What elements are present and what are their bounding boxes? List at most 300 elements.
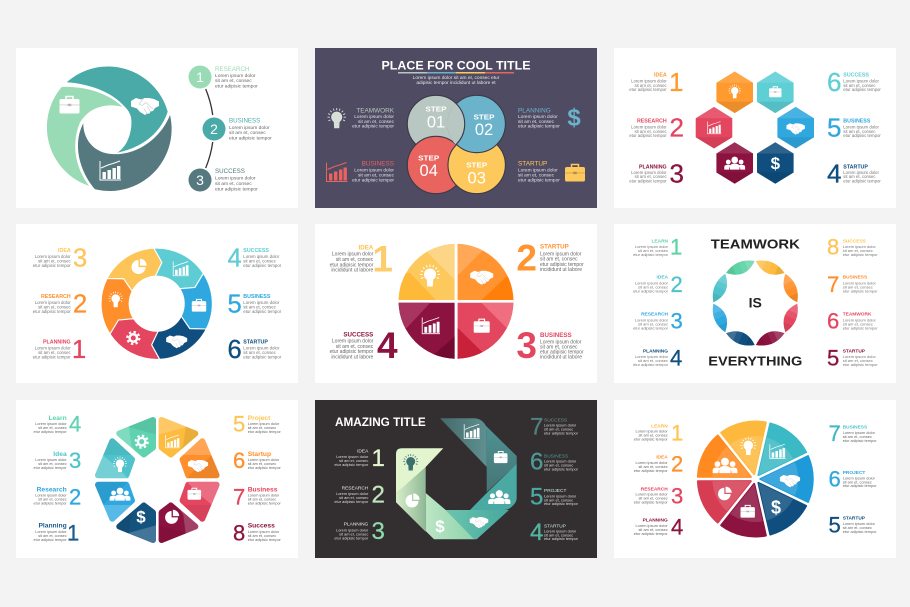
text: research xyxy=(629,119,668,138)
slice: blue xyxy=(760,456,813,502)
icon: bulb xyxy=(113,457,127,472)
text: business xyxy=(843,275,878,294)
text: startup xyxy=(843,164,881,184)
text: learn: etur adipisic tempor xyxy=(633,252,669,257)
text: business: Lorem ipsum dolor xyxy=(248,494,280,498)
text: teamwork: Lorem ipsum dolor xyxy=(354,114,394,120)
text: learn: Lorem ipsum dolor xyxy=(35,422,67,426)
icon: bulb xyxy=(108,291,123,307)
text: success: Lorem ipsum dolor xyxy=(332,339,374,345)
number 7: 7 xyxy=(530,413,543,440)
number 5: 5 xyxy=(233,412,245,437)
text: project: PROJECT xyxy=(544,488,566,494)
icon: dollar: $ xyxy=(435,517,445,536)
step 1 badge: 1 xyxy=(196,69,204,85)
text: business: etur adipisic tempor xyxy=(229,136,272,142)
text: idea: sit am et, consec xyxy=(38,462,67,466)
text: idea: Idea xyxy=(53,451,67,458)
icon: briefcase xyxy=(740,505,755,518)
text: learn: etur adipisic tempor xyxy=(634,436,668,441)
text: success: etur adipisic tempor xyxy=(248,538,282,542)
text: startup: etur adipisic tempor xyxy=(544,536,579,541)
text: project: etur adipisic tempor xyxy=(544,501,579,506)
text: learn: LEARN xyxy=(651,423,668,429)
text: planning: sit am et, consec xyxy=(638,358,668,363)
text: learn: Learn xyxy=(48,415,67,422)
text: startup: Lorem ipsum dolor xyxy=(518,168,558,174)
icon: bulb xyxy=(728,85,741,98)
number 6: 6 xyxy=(233,448,245,473)
text: idea: Lorem ipsum dolor xyxy=(635,281,669,286)
text: startup: Lorem ipsum dolor xyxy=(843,521,876,526)
text: success: SUCCESS xyxy=(243,248,269,254)
step 1 badge xyxy=(188,66,212,88)
text: research: Lorem ipsum dolor xyxy=(635,317,669,322)
text: idea: Lorem ipsum dolor xyxy=(336,454,369,459)
text: startup xyxy=(843,348,878,367)
text: idea xyxy=(33,248,72,268)
text: research: Research xyxy=(37,487,67,494)
text: business: etur adipisic tempor xyxy=(248,502,282,506)
text: planning: Lorem ipsum dolor xyxy=(635,354,669,359)
text: planning: Lorem ipsum dolor xyxy=(631,170,667,175)
text: success: Success xyxy=(248,523,275,530)
text: research: Lorem ipsum dolor xyxy=(336,491,369,496)
text: planning: Lorem ipsum dolor xyxy=(35,530,67,534)
text: startup: sit am et, consec xyxy=(540,256,578,262)
icon: handshake xyxy=(470,517,488,528)
number 3: 3 xyxy=(670,309,683,334)
text: business xyxy=(540,332,584,361)
icon: bulb xyxy=(328,108,346,128)
icon: pie xyxy=(718,487,732,500)
number 2: 2 xyxy=(73,290,87,318)
number 4: 4 xyxy=(530,519,543,546)
text: project xyxy=(544,488,579,506)
icon: pie xyxy=(132,259,147,274)
text: idea: Lorem ipsum dolor xyxy=(635,460,668,465)
icon: bulb xyxy=(420,264,440,286)
number 4: 4 xyxy=(670,345,682,370)
text: startup: incididunt ut labore xyxy=(540,267,582,273)
text: business xyxy=(229,118,272,142)
text: success: sit am et, consec xyxy=(215,181,252,187)
text: idea: sit am et, consec xyxy=(638,285,668,290)
hexagon: navy xyxy=(757,142,794,184)
step labels: 01 xyxy=(427,114,445,132)
text: business: Lorem ipsum dolor xyxy=(544,458,577,463)
text: teamwork: sit am et, consec xyxy=(358,119,395,125)
icon: handshake xyxy=(786,123,805,135)
number 8: 8 xyxy=(827,235,839,260)
text: planning: PLANNING xyxy=(643,348,668,354)
text: teamwork: sit am et, consec xyxy=(843,321,873,326)
slice: orange xyxy=(694,433,761,497)
text: project: etur adipisic tempor xyxy=(248,430,282,434)
petal: yellow xyxy=(747,250,790,291)
text: startup: Lorem ipsum dolor xyxy=(248,458,280,462)
text: idea xyxy=(330,245,374,274)
segment: red xyxy=(110,319,160,359)
step 02 circle xyxy=(448,95,505,153)
text: research: RESEARCH xyxy=(641,312,669,318)
text: research: Lorem ipsum dolor xyxy=(631,124,667,130)
text: planning: PLANNING xyxy=(639,164,667,170)
number 4: 4 xyxy=(69,412,81,437)
text: research: sit am et, consec xyxy=(638,496,668,501)
text: planning: sit am et, consec xyxy=(38,534,67,538)
text: business: etur adipisic tempor xyxy=(540,350,584,356)
chart: spiral dark segment xyxy=(78,115,172,191)
icon: people xyxy=(724,157,745,170)
text: learn: sit am et, consec xyxy=(38,426,67,430)
ribbon: hands fold xyxy=(446,510,509,539)
text: teamwork: TEAMWORK xyxy=(356,107,395,114)
text: idea: etur adipisic tempor xyxy=(33,263,71,268)
text: startup: sit am et, consec xyxy=(843,525,872,530)
text: business: Lorem ipsum dolor xyxy=(354,168,394,174)
text: startup: STARTUP xyxy=(843,348,866,354)
segment: orange xyxy=(172,430,222,480)
number 6: 6 xyxy=(530,449,543,476)
number 2: 2 xyxy=(372,482,385,509)
panel: folded octagon on dark xyxy=(315,400,597,558)
icon: briefcase xyxy=(494,452,508,463)
text: learn: Lorem ipsum dolor xyxy=(635,244,669,249)
petal: maroon xyxy=(747,315,790,356)
text: project: Lorem ipsum dolor xyxy=(843,475,876,480)
text: idea: Lorem ipsum dolor xyxy=(35,254,71,259)
subtitle: Lorem ipsum dolor sit am et, consec etur xyxy=(413,75,500,81)
text: success: Lorem ipsum dolor xyxy=(843,244,876,249)
text: success: etur adipisic tempor xyxy=(843,252,878,257)
text: research: etur adipisic tempor xyxy=(634,500,668,505)
icon: briefcase xyxy=(60,96,80,114)
number 7: 7 xyxy=(827,272,839,297)
text: startup: etur adipisic tempor xyxy=(843,362,878,367)
text: project: Lorem ipsum dolor xyxy=(248,422,280,426)
text: success xyxy=(248,523,282,542)
number 2: 2 xyxy=(671,452,683,477)
text: success: etur adipisic tempor xyxy=(243,263,282,268)
text: planning: etur adipisic tempor xyxy=(34,538,67,542)
text: startup: STARTUP xyxy=(518,160,547,167)
text: research: Lorem ipsum dolor xyxy=(35,494,67,498)
text: teamwork: TEAMWORK xyxy=(843,312,872,318)
text: planning: sit am et, consec xyxy=(518,119,555,125)
step 01 overlap over step 02 xyxy=(448,103,466,145)
text: startup: STARTUP xyxy=(540,244,569,251)
step labels: 03 xyxy=(468,169,486,187)
text: idea: IDEA xyxy=(58,248,71,254)
text: learn: sit am et, consec xyxy=(638,432,668,437)
ribbon: pie fold xyxy=(396,465,426,532)
number 8: 8 xyxy=(233,521,245,546)
step 01 circle xyxy=(407,95,465,153)
quadrant: orange xyxy=(458,244,514,300)
segment: blue xyxy=(92,480,142,530)
text: business: sit am et, consec xyxy=(843,434,872,439)
text: success xyxy=(243,248,282,268)
text: business: sit am et, consec xyxy=(843,129,876,134)
text: success xyxy=(544,417,579,435)
icon: handshake xyxy=(470,271,493,285)
text: business xyxy=(243,294,282,314)
subtitle: adipisic tempor incididunt ut labore et xyxy=(416,80,496,86)
text: startup: etur adipisic tempor xyxy=(540,262,584,268)
text: startup: Lorem ipsum dolor xyxy=(243,346,280,350)
text: startup: Startup xyxy=(248,451,271,458)
text: startup: sit am et, consec xyxy=(243,350,277,355)
text: learn: LEARN xyxy=(651,238,669,244)
text: teamwork: etur adipisic tempor xyxy=(843,325,878,330)
text: idea: IDEA xyxy=(656,455,668,461)
text: startup: Lorem ipsum dolor xyxy=(843,170,879,175)
text: planning xyxy=(634,518,668,536)
text: idea: etur adipisic tempor xyxy=(634,468,668,473)
chart: spiral green segment xyxy=(47,87,123,186)
text: research: sit am et, consec xyxy=(634,129,668,134)
text: success xyxy=(215,168,258,192)
text: learn xyxy=(634,423,668,441)
quadrant: red xyxy=(458,302,514,359)
step labels: STEP xyxy=(426,105,446,114)
text: idea xyxy=(34,451,67,470)
text: business: Lorem ipsum dolor xyxy=(243,300,280,305)
text: project: PROJECT xyxy=(843,470,865,476)
number 7: 7 xyxy=(828,421,841,446)
ribbon: case fold xyxy=(480,420,517,492)
text: business: etur adipisic tempor xyxy=(544,466,579,471)
icon: briefcase xyxy=(192,299,206,312)
text: planning: sit am et, consec xyxy=(38,350,72,355)
petal: navy xyxy=(720,315,763,356)
text: business: sit am et, consec xyxy=(229,130,266,136)
text: success: Lorem ipsum dolor xyxy=(843,78,879,84)
chart: spiral teal segment xyxy=(67,67,168,153)
slice: cyan xyxy=(741,420,809,489)
number 4: 4 xyxy=(671,514,683,539)
icon: bar chart xyxy=(770,444,786,458)
step 3 badge: 3 xyxy=(196,172,204,188)
hexagon: cyan xyxy=(757,72,794,113)
text: startup: Lorem ipsum dolor xyxy=(540,252,582,258)
number 2: 2 xyxy=(516,238,537,279)
text: success xyxy=(843,73,881,92)
hexagon: blue xyxy=(777,107,814,148)
number 2: 2 xyxy=(670,113,684,143)
segment: maroon xyxy=(157,500,203,546)
text: teamwork: etur adipisic tempor xyxy=(352,124,394,130)
text: business xyxy=(544,453,579,471)
step labels xyxy=(418,105,494,187)
text: business: BUSINESS xyxy=(229,118,260,125)
text: project: sit am et, consec xyxy=(544,497,573,502)
number 1: 1 xyxy=(372,445,385,472)
text: business: etur adipisic tempor xyxy=(843,438,877,443)
number 1: 1 xyxy=(372,238,393,279)
text: success: sit am et, consec xyxy=(336,344,374,350)
text: business: etur adipisic tempor xyxy=(843,133,881,138)
text: idea: etur adipisic tempor xyxy=(330,262,374,268)
text: planning: Planning xyxy=(38,523,67,530)
text: planning: Lorem ipsum dolor xyxy=(635,523,668,528)
text: planning xyxy=(34,523,67,542)
text: startup xyxy=(540,244,584,273)
step labels: 02 xyxy=(475,121,493,139)
text: planning: PLANNING xyxy=(518,107,551,114)
text: research: Lorem ipsum dolor xyxy=(215,73,256,79)
icon: people xyxy=(713,458,737,473)
text: research: sit am et, consec xyxy=(38,498,67,502)
text: idea: etur adipisic tempor xyxy=(633,289,669,294)
text: idea: sit am et, consec xyxy=(38,258,72,264)
text: project: sit am et, consec xyxy=(248,426,276,430)
text: business: incididunt ut labore xyxy=(540,355,582,361)
number 4: 4 xyxy=(827,158,841,188)
panel: eight pentagons xyxy=(16,400,298,558)
panel: three-part spiral xyxy=(16,48,298,208)
text: planning: sit am et, consec xyxy=(339,531,368,536)
text: planning: etur adipisic tempor xyxy=(518,124,560,130)
text: idea xyxy=(634,455,668,473)
number 1: 1 xyxy=(67,521,79,546)
text: project: sit am et, consec xyxy=(843,479,872,484)
text: idea: IDEA xyxy=(357,448,369,454)
text: research: RESEARCH xyxy=(641,486,668,492)
text: business: Lorem ipsum dolor xyxy=(229,125,270,131)
icon: bar chart xyxy=(464,424,480,438)
text: startup: etur adipisic tempor xyxy=(843,178,881,184)
text: research xyxy=(334,485,369,504)
icon: bar chart xyxy=(173,262,189,276)
heading: everything: EVERYTHING xyxy=(708,353,802,368)
text: success: etur adipisic tempor xyxy=(843,87,881,92)
icon: dollar: $ xyxy=(771,154,781,173)
segment: orange xyxy=(101,278,134,334)
number 5: 5 xyxy=(827,345,839,370)
text: planning: etur adipisic tempor xyxy=(634,531,668,536)
title: PLACE FOR COOL TITLE xyxy=(382,58,530,72)
text: success: Lorem ipsum dolor xyxy=(243,254,280,259)
number 1: 1 xyxy=(669,67,683,97)
text: startup xyxy=(243,339,282,360)
number 6: 6 xyxy=(827,309,839,334)
text: business: sit am et, consec xyxy=(843,285,873,290)
icon: briefcase xyxy=(769,87,782,97)
icon: pie xyxy=(406,493,420,508)
icon: handshake xyxy=(166,335,187,348)
text: business: Business xyxy=(248,487,278,494)
subtitle xyxy=(413,75,500,86)
icon: bulb xyxy=(740,437,756,455)
text: research xyxy=(34,487,67,506)
text: startup: etur adipisic tempor xyxy=(843,529,877,534)
step labels: STEP xyxy=(466,161,487,170)
text: research xyxy=(33,294,72,314)
slice: navy xyxy=(741,469,809,538)
text: idea: IDEA xyxy=(359,245,374,252)
text: research: etur adipisic tempor xyxy=(334,499,369,504)
petal: green xyxy=(720,250,763,291)
text: teamwork xyxy=(352,107,395,130)
text: success: sit am et, consec xyxy=(843,83,876,88)
text: planning: sit am et, consec xyxy=(634,174,668,179)
text: business: BUSINESS xyxy=(544,453,568,459)
text: startup: STARTUP xyxy=(243,339,268,345)
panel: six hexagons xyxy=(614,48,896,208)
number 5: 5 xyxy=(827,113,841,143)
text: idea: sit am et, consec xyxy=(339,458,368,463)
text: idea: sit am et, consec xyxy=(638,464,668,469)
text: success: sit am et, consec xyxy=(243,258,277,264)
text: project xyxy=(248,415,282,434)
number 3: 3 xyxy=(73,244,87,272)
number 3: 3 xyxy=(671,483,683,508)
icon: dollar: $ xyxy=(771,498,781,518)
text: research: sit am et, consec xyxy=(638,321,668,326)
text: research: Lorem ipsum dolor xyxy=(35,300,71,305)
text: project: Project xyxy=(248,415,271,422)
text: planning: sit am et, consec xyxy=(638,527,668,532)
text: research: sit am et, consec xyxy=(215,78,252,84)
number 4: 4 xyxy=(228,244,242,272)
text: teamwork xyxy=(843,312,878,330)
text: research: Lorem ipsum dolor xyxy=(635,492,668,497)
icon: bar chart xyxy=(166,435,180,448)
text: idea: etur adipisic tempor xyxy=(334,462,369,467)
text: startup: sit am et, consec xyxy=(843,358,873,363)
text: success: SUCCESS xyxy=(843,73,869,79)
text: learn xyxy=(633,238,669,257)
icon: handshake xyxy=(131,98,159,115)
text: startup: sit am et, consec xyxy=(518,172,555,178)
text: research: RESEARCH xyxy=(637,119,667,125)
quadrant: maroon xyxy=(398,302,455,359)
text: success xyxy=(843,238,878,257)
text: learn: sit am et, consec xyxy=(638,248,668,253)
text: planning xyxy=(633,348,669,367)
text: idea: Lorem ipsum dolor xyxy=(332,252,374,258)
text: startup xyxy=(248,451,282,470)
text: startup: sit am et, consec xyxy=(843,174,876,179)
number 5: 5 xyxy=(828,512,841,537)
segment: navy xyxy=(111,500,157,546)
icon: gear xyxy=(127,332,139,344)
text: business: sit am et, consec xyxy=(358,172,395,178)
segment: navy xyxy=(152,316,206,359)
text: success: sit am et, consec xyxy=(544,426,573,431)
text: success: SUCCESS xyxy=(343,331,373,338)
text: idea: etur adipisic tempor xyxy=(34,466,67,470)
text: business xyxy=(352,160,395,184)
number 1: 1 xyxy=(671,420,683,445)
text: business: BUSINESS xyxy=(362,160,394,167)
ring chart xyxy=(101,248,212,359)
ribbon: people fold xyxy=(470,464,517,510)
segment: green xyxy=(111,414,157,460)
text: success: SUCCESS xyxy=(843,238,867,244)
text: planning: PLANNING xyxy=(643,518,668,524)
text: planning xyxy=(33,339,72,360)
text: business: Lorem ipsum dolor xyxy=(540,339,582,345)
icon: people xyxy=(488,490,510,504)
text: startup: etur adipisic tempor xyxy=(243,354,282,360)
text: business: BUSINESS xyxy=(843,275,868,281)
heading: is: IS xyxy=(749,294,762,310)
text: business: sit am et, consec xyxy=(243,304,277,310)
segment: cyan xyxy=(154,248,203,289)
